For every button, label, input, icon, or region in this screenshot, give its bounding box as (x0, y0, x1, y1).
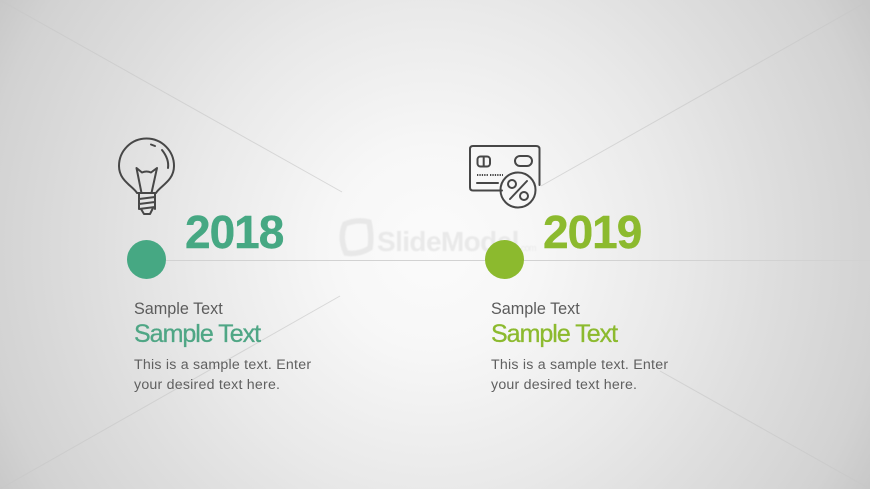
timeline dot 2019 (485, 240, 524, 279)
timeline dot 2018 (127, 240, 166, 279)
description 2018: This is a sample text. Enter (134, 357, 311, 373)
heading 2018: Sample Text (134, 320, 260, 348)
watermark logo (340, 218, 536, 257)
year 2018: 2018 (185, 206, 283, 258)
heading 2019: Sample Text (491, 320, 617, 348)
description 2018 (134, 357, 311, 393)
year 2019: 2019 (543, 206, 641, 258)
description 2018: your desired text here. (134, 377, 280, 393)
description 2019: This is a sample text. Enter (491, 357, 668, 373)
label 2019: Sample Text (491, 300, 580, 318)
icon: light bulb (118, 138, 175, 215)
description 2019: your desired text here. (491, 377, 637, 393)
label 2018: Sample Text (134, 300, 223, 318)
description 2019 (491, 357, 668, 393)
watermark logo: SlideModel.com (377, 226, 536, 257)
icon: credit card with percent (469, 145, 540, 208)
